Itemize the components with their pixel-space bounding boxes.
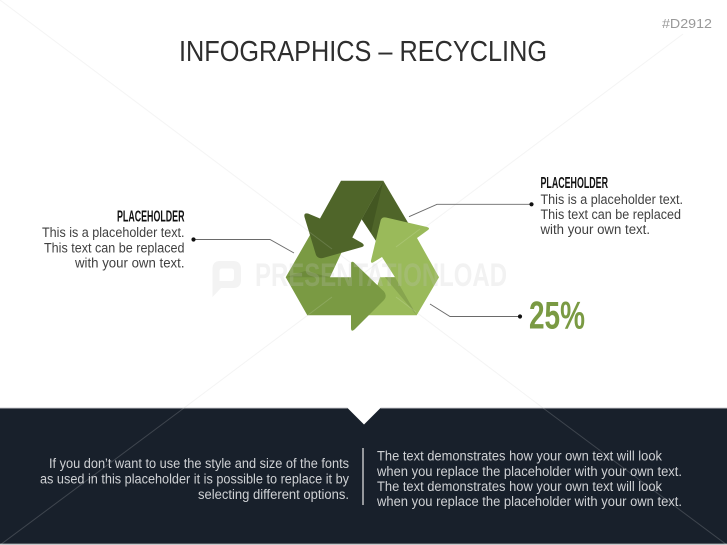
connector percent [430, 304, 522, 319]
dark arrow head [304, 181, 383, 258]
footer text: right: when you replace the placeholder with your own text. [376, 494, 682, 509]
footer text: left [40, 456, 349, 502]
footer text: left: selecting different options. [198, 487, 349, 502]
footer text: left: If you don’t want to use the style and size of the fonts [49, 456, 349, 471]
connector left [191, 237, 294, 253]
watermark [212, 257, 507, 297]
body right [540, 192, 683, 237]
footer text: left: as used in this placeholder it is possible to replace it by [40, 472, 349, 486]
watermark text: PRESENTATIONLOAD [255, 257, 507, 293]
footer text: right: The text demonstrates how your own text will look [377, 448, 662, 464]
heading left: PLACEHOLDER [117, 208, 185, 226]
middle arrow [286, 235, 386, 331]
body right: This is a placeholder text. [540, 192, 683, 207]
body right: with your own text. [540, 222, 650, 237]
footer text: right [376, 448, 682, 509]
body right: This text can be replaced [540, 207, 681, 222]
body left: This text can be replaced [44, 240, 184, 256]
light arrow [368, 217, 439, 315]
heading right: PLACEHOLDER [540, 175, 608, 192]
title: INFOGRAPHICS – RECYCLING [179, 36, 547, 68]
callout: right [409, 175, 683, 237]
footer text: right: when you replace the placeholder with your own text. [376, 464, 682, 479]
callout: left [42, 208, 294, 270]
footer divider [362, 448, 364, 505]
dark arrow tail [362, 181, 410, 241]
recycling symbol [286, 181, 439, 331]
footer text: right: The text demonstrates how your own text will look [377, 479, 662, 494]
body left: This is a placeholder text. [42, 225, 184, 240]
body left: with your own text. [74, 256, 184, 270]
callout: 25% [430, 294, 585, 338]
watermark icon [212, 261, 241, 297]
footer band [0, 408, 727, 545]
body left [42, 225, 184, 270]
connector right [409, 202, 534, 217]
code label: #D2912 [662, 16, 712, 31]
percent value: 25% [529, 294, 585, 338]
